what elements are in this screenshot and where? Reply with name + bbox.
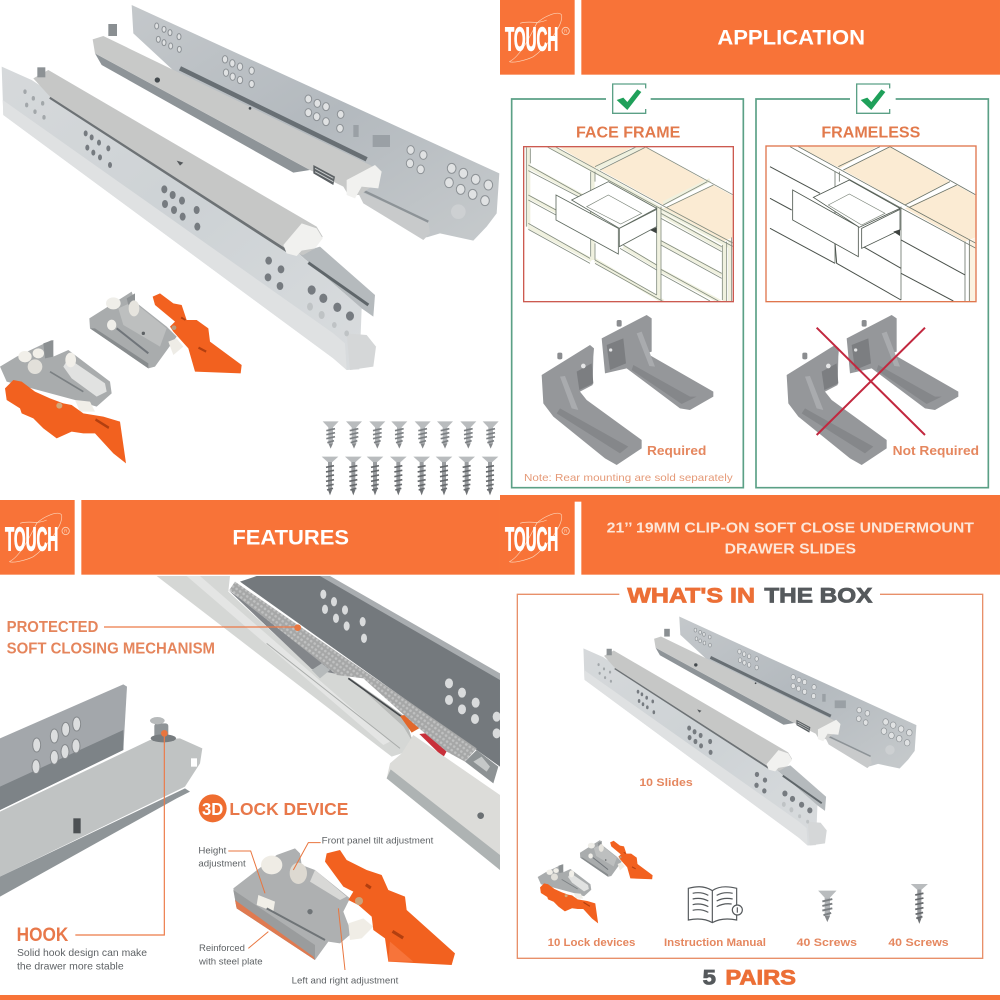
- heading: 3D lock device: [199, 794, 348, 822]
- label: height adjustment: Height: [198, 845, 227, 855]
- label: front panel tilt adjustment: Front panel tilt adjustment: [322, 835, 434, 845]
- label: height adjustment: adjustment: [198, 859, 246, 869]
- heading: what's in the box: [627, 583, 873, 608]
- header: title bar: APPLICATION: [717, 25, 865, 49]
- header: logo block: R: [564, 29, 568, 34]
- bottom strip: [500, 495, 1000, 502]
- heading: 3D lock device: 3D: [202, 799, 223, 819]
- label: 10 lock devices: 10 Lock devices: [548, 937, 635, 949]
- icon: long screw: [911, 884, 928, 924]
- footer: 5 pairs: 5: [703, 965, 716, 989]
- photo: soft closing mechanism rail: [157, 576, 501, 870]
- photo: lock device: [233, 848, 455, 965]
- rear drawer slide: [93, 5, 499, 241]
- header: title bar: 21’’ 19MM CLIP-ON SOFT CLOSE UNDERMOUNT: [607, 519, 974, 536]
- header: logo block: [500, 500, 575, 575]
- card: frameless: [756, 84, 988, 488]
- icon: instruction manual: [688, 887, 742, 923]
- callout: hook: HOOK: [17, 925, 68, 946]
- drawing: frameless cabinet: [766, 146, 976, 302]
- label: reinforced with steel plate: [198, 943, 263, 966]
- icon: rear mounting brackets, crossed out: [787, 315, 958, 465]
- callout: protected soft closing mechanism: [7, 619, 301, 657]
- heading: frameless: FRAMELESS: [821, 125, 920, 142]
- panel: product photo: [0, 5, 499, 495]
- callout: hook: [17, 730, 168, 972]
- header: title bar: [581, 500, 1000, 575]
- heading: what's in the box: THE BOX: [764, 583, 873, 608]
- label: left and right adjustment: Left and right adjustment: [292, 976, 399, 986]
- label: instruction manual: Instruction Manual: [664, 937, 766, 949]
- photo: lock devices: [538, 840, 653, 923]
- header: title bar: [81, 500, 500, 575]
- header: logo block: TOUCH: [505, 522, 558, 559]
- label: 40 screws long: 40 Screws: [888, 937, 949, 949]
- lock device, rear: [89, 292, 242, 373]
- panel: application: [500, 0, 1000, 502]
- header: logo block: R: [64, 529, 68, 534]
- box frame: [517, 594, 983, 958]
- icon: short screw: [818, 891, 837, 922]
- label: not required: Not Required: [893, 443, 979, 458]
- label: 10 slides: 10 Slides: [639, 777, 693, 789]
- front drawer slide: [2, 67, 376, 370]
- short screws row: [323, 421, 499, 449]
- callout: protected soft closing mechanism: PROTECTED: [7, 619, 98, 636]
- note: Note: Rear mounting are sold separately: [524, 473, 734, 484]
- photo: front slide: [583, 648, 827, 845]
- footer: 5 pairs: [703, 965, 796, 989]
- callout: hook: Solid hook design can make: [17, 948, 147, 959]
- panel: what's in the box: [0, 500, 1000, 1000]
- label: required: Required: [647, 443, 706, 458]
- header: title bar: DRAWER SLIDES: [725, 540, 856, 557]
- label: 40 screws short: 40 Screws: [797, 937, 857, 949]
- long screws row: [322, 457, 498, 495]
- callout: hook: the drawer more stable: [17, 961, 124, 972]
- heading: what's in the box: WHAT'S IN: [627, 583, 755, 608]
- header: title bar: [581, 0, 1000, 75]
- icon: rear mounting brackets: [542, 315, 713, 465]
- header: title bar: FEATURES: [232, 525, 349, 549]
- panel: features: [0, 500, 501, 986]
- header: logo block: TOUCH: [5, 522, 58, 559]
- header: logo block: [0, 500, 75, 575]
- header: logo block: [500, 0, 575, 75]
- card: face frame: [512, 84, 743, 488]
- header: logo block: R: [564, 529, 568, 534]
- label: height adjustment: [198, 845, 246, 869]
- header: logo block: TOUCH: [505, 22, 558, 59]
- photo: rear slide: [654, 617, 916, 769]
- heading: 3D lock device: LOCK DEVICE: [229, 799, 348, 819]
- photo: hook slide end: [0, 684, 202, 897]
- icon: green check badge: [857, 84, 890, 113]
- drawing: face frame cabinet: [524, 144, 733, 302]
- callout: protected soft closing mechanism: SOFT CLOSING MECHANISM: [7, 640, 215, 657]
- bottom strip: [0, 995, 1000, 1000]
- heading: face frame: FACE FRAME: [576, 125, 680, 142]
- icon: green check badge: [613, 84, 646, 113]
- callout lines: lock device: [228, 843, 345, 970]
- label: reinforced with steel plate: Reinforced: [199, 943, 245, 953]
- label: reinforced with steel plate: with steel plate: [198, 956, 263, 966]
- lock device, front: [0, 340, 126, 463]
- footer: 5 pairs: PAIRS: [725, 965, 796, 989]
